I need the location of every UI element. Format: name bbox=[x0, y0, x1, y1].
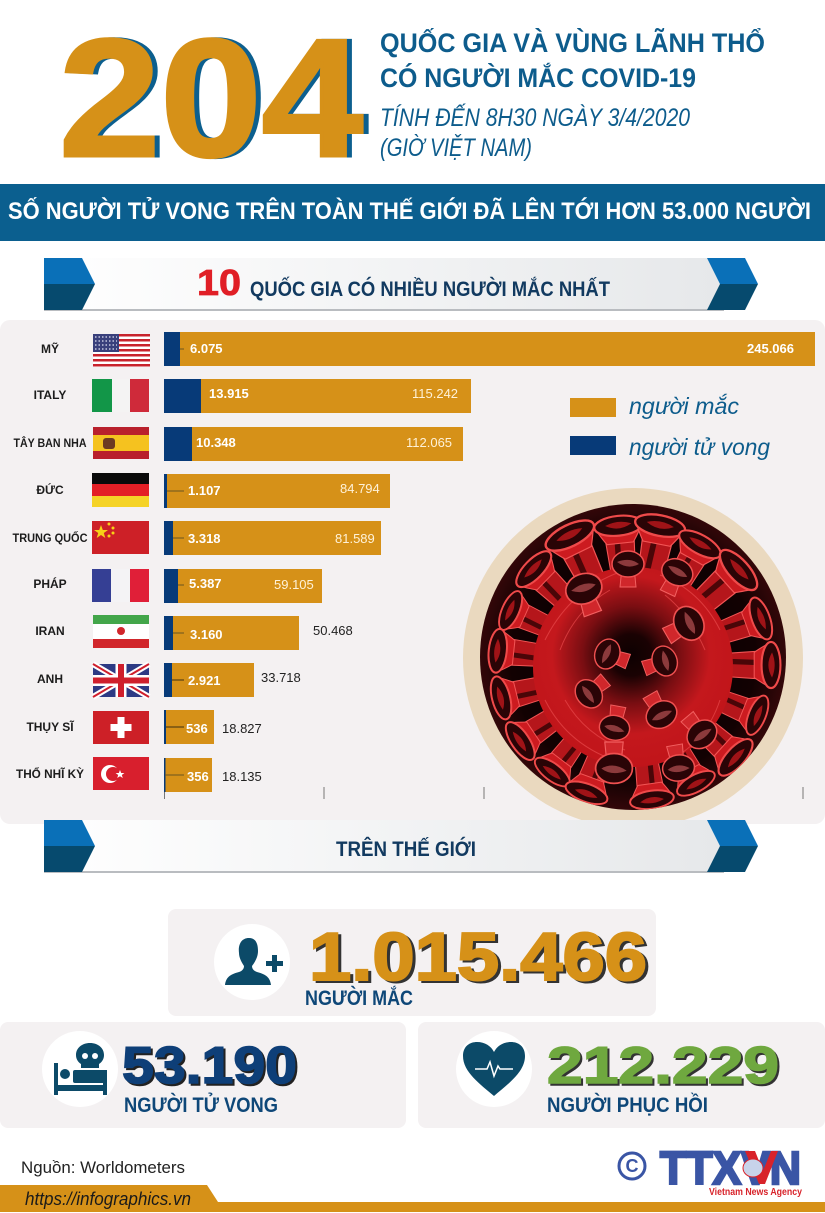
stat panel: cases bbox=[168, 909, 656, 1016]
row: Pháp: PHÁP bbox=[33, 576, 67, 591]
title number 204: 204 bbox=[64, 4, 368, 192]
illustration: coronavirus bbox=[463, 488, 803, 828]
row: Thụy Sĩ: THỤY SĨ bbox=[26, 719, 74, 734]
footer ribbon with url: https://infographics.vn bbox=[25, 1189, 191, 1209]
title text bbox=[380, 26, 765, 162]
row: Tây Ban Nha: 10.348 bbox=[196, 435, 236, 450]
row: Iran: 50.468 bbox=[313, 623, 353, 638]
icon: person plus bbox=[214, 924, 290, 1000]
row: Tây Ban Nha: 112.065 bbox=[406, 435, 452, 450]
row: Iran: 3.160 bbox=[190, 627, 223, 642]
row: Mỹ: 245.066 bbox=[747, 341, 794, 356]
icon: bed and skull bbox=[42, 1031, 118, 1107]
row: Thổ Nhĩ Kỳ: 18.135 bbox=[222, 769, 262, 784]
row: Pháp: 59.105 bbox=[274, 577, 314, 592]
title text: CÓ NGƯỜI MẮC COVID-19 bbox=[380, 62, 696, 93]
row: Thổ Nhĩ Kỳ bbox=[16, 757, 262, 792]
row: Đức bbox=[36, 473, 390, 508]
number: 53.190 bbox=[122, 1037, 297, 1095]
row: Tây Ban Nha: TÂY BAN NHA bbox=[14, 435, 87, 450]
row: Pháp: 5.387 bbox=[189, 576, 222, 591]
footer ribbon with url bbox=[0, 1185, 825, 1212]
ribbon heading: top 10: 10 bbox=[197, 262, 241, 303]
row: Thổ Nhĩ Kỳ: THỔ NHĨ KỲ bbox=[16, 766, 84, 781]
title text: TÍNH ĐẾN 8H30 NGÀY 3/4/2020 bbox=[380, 102, 690, 132]
stat panel: recovered: NGƯỜI PHỤC HỒI bbox=[547, 1093, 708, 1117]
row: Anh: ANH bbox=[37, 672, 63, 686]
source: Nguồn: Worldometers bbox=[21, 1158, 185, 1177]
title number 204: 204 bbox=[59, 4, 363, 192]
row: Đức: ĐỨC bbox=[36, 482, 64, 497]
ribbon heading: world: TRÊN THẾ GIỚI bbox=[336, 837, 476, 861]
legend: người tử vong bbox=[629, 434, 770, 460]
row: Trung Quốc bbox=[12, 521, 381, 555]
row: Trung Quốc: 3.318 bbox=[188, 531, 221, 546]
axis ticks bbox=[164, 787, 803, 799]
row: Italy bbox=[34, 379, 471, 413]
stat panel: deaths bbox=[0, 1022, 406, 1128]
row: Mỹ: MỸ bbox=[41, 341, 59, 356]
row: Đức: 1.107 bbox=[188, 483, 221, 498]
logo: TTXVN: Vietnam News Agency bbox=[709, 1186, 802, 1198]
title text: QUỐC GIA VÀ VÙNG LÃNH THỔ bbox=[380, 26, 765, 58]
row: Thụy Sĩ: 536 bbox=[186, 721, 208, 736]
number: 1.015.466 bbox=[312, 921, 650, 997]
number: 1.015.466 bbox=[309, 919, 647, 995]
row: Trung Quốc: TRUNG QUỐC bbox=[12, 530, 88, 545]
stat panel: deaths: NGƯỜI TỬ VONG bbox=[124, 1093, 278, 1117]
logo: TTXVN: C bbox=[626, 1156, 638, 1176]
row: Iran bbox=[35, 615, 353, 650]
stat panel: recovered bbox=[418, 1022, 825, 1128]
row: Đức: 84.794 bbox=[340, 481, 380, 496]
row: Anh bbox=[37, 663, 301, 697]
row: Italy: 115.242 bbox=[412, 386, 458, 401]
row: Thụy Sĩ bbox=[26, 710, 262, 744]
legend: người mắc bbox=[629, 393, 740, 419]
row: Anh: 2.921 bbox=[188, 673, 221, 688]
number: 212.229 bbox=[547, 1037, 779, 1095]
row: Pháp bbox=[33, 569, 322, 603]
stat panel: cases: NGƯỜI MẮC bbox=[305, 986, 413, 1010]
row: Mỹ: 6.075 bbox=[190, 341, 223, 356]
logo: TTXVN bbox=[619, 1142, 802, 1198]
row: Iran: IRAN bbox=[35, 624, 65, 638]
number: 53.190 bbox=[124, 1039, 299, 1097]
ribbon heading: world bbox=[44, 820, 758, 873]
logo: TTXVN: TTXVN bbox=[660, 1142, 801, 1194]
row: Trung Quốc: 81.589 bbox=[335, 531, 375, 546]
row: Tây Ban Nha bbox=[14, 427, 463, 461]
number: 212.229 bbox=[549, 1039, 781, 1097]
headline band bbox=[0, 184, 825, 241]
row: Italy: 13.915 bbox=[209, 386, 249, 401]
row: Italy: ITALY bbox=[34, 388, 66, 402]
row: Thụy Sĩ: 18.827 bbox=[222, 721, 262, 736]
title text: (GIỜ VIỆT NAM) bbox=[380, 133, 532, 162]
ribbon heading: top 10: QUỐC GIA CÓ NHIỀU NGƯỜI MẮC NHẤT bbox=[250, 277, 610, 301]
icon: heart with pulse bbox=[456, 1031, 532, 1107]
panel: top 10 chart bbox=[0, 320, 825, 824]
row: Thổ Nhĩ Kỳ: 356 bbox=[187, 769, 209, 784]
row: Anh: 33.718 bbox=[261, 670, 301, 685]
row: Mỹ bbox=[41, 332, 815, 367]
ribbon heading: top 10 bbox=[44, 258, 758, 311]
legend bbox=[570, 393, 770, 460]
